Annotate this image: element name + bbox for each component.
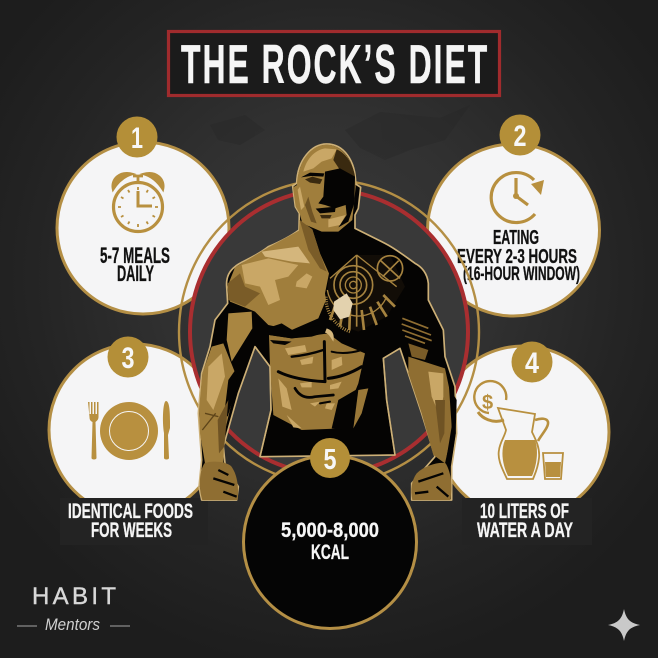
label: EATING [493, 227, 539, 249]
panel 5: calories: 5 [324, 444, 336, 476]
label band 4 [462, 498, 592, 545]
panel 2: timing [428, 144, 600, 316]
number badges: 4 [525, 347, 539, 380]
panel 3: foods [49, 344, 221, 516]
title: THE ROCK’S DIET [181, 33, 487, 95]
number badges: 3 [122, 342, 134, 375]
label: 10 LITERS OF [480, 500, 569, 523]
torso and arms [199, 312, 457, 500]
badge 5 [310, 438, 350, 478]
figure: muscular man illustration [198, 144, 457, 500]
icon: sparkle star [608, 609, 640, 641]
central rings [179, 180, 479, 484]
label: 5-7 MEALS [100, 243, 170, 268]
icon: alarm clock [112, 173, 164, 232]
title box [168, 32, 500, 96]
arm tattoo [402, 318, 432, 343]
label: 5,000-8,000 [281, 519, 379, 542]
chest patches [242, 258, 298, 305]
left arm [227, 312, 252, 362]
icon: coin, jug and glass: $ [482, 392, 493, 414]
abs [269, 333, 365, 430]
chest tattoo highlight [333, 293, 353, 319]
icon: coin, jug and glass [474, 381, 563, 479]
panel 5: calories: KCAL [311, 541, 349, 564]
right fist [411, 463, 451, 500]
panel 4: water [437, 346, 609, 518]
panel 2: timing: (16-HOUR WINDOW) [463, 264, 580, 285]
number badges: 1 [131, 122, 143, 155]
left fist [200, 462, 238, 500]
head [228, 145, 356, 307]
number badges [108, 114, 552, 382]
logo: Habit Mentors: HABIT [32, 583, 116, 610]
label band 3 [60, 498, 208, 545]
icon: clock with arrow [491, 173, 544, 223]
panel 1: meals: DAILY [117, 261, 154, 286]
label: IDENTICAL FOODS [68, 500, 193, 523]
panel 5: calories [244, 438, 416, 628]
chest and shoulder [227, 220, 329, 330]
torso edge lines [255, 347, 400, 457]
icon: plate and cutlery [88, 401, 170, 460]
label band 4: WATER A DAY [477, 519, 573, 542]
silhouette [198, 144, 457, 500]
panel 1: meals [57, 142, 229, 314]
chest tattoo [326, 255, 405, 332]
right arm [408, 357, 452, 463]
logo: Habit Mentors [17, 583, 130, 634]
panel 2: timing: EVERY 2-3 HOURS [457, 246, 577, 268]
logo: Habit Mentors: Mentors [45, 615, 100, 634]
label band 3: FOR WEEKS [91, 519, 172, 542]
number badges: 2 [514, 120, 526, 153]
